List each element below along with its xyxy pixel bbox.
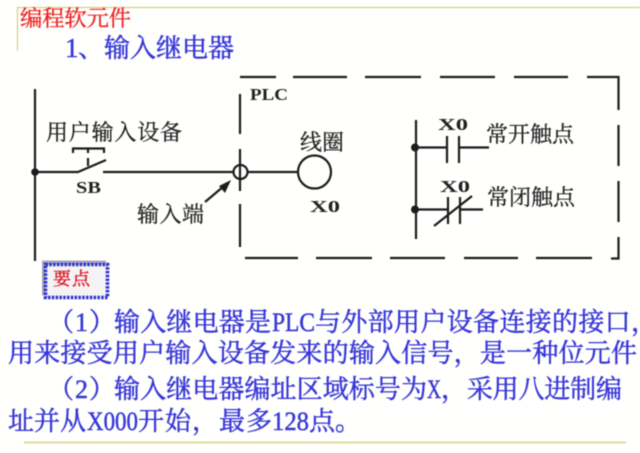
label: user input device: 用户输入设备: [46, 120, 182, 145]
label: normally open contact: 常开触点: [486, 122, 575, 147]
label: normally closed contact: 常闭触点: [487, 185, 576, 210]
label: X0 closed contact: X0: [440, 177, 470, 196]
heading: input relay: 、: [78, 34, 104, 63]
explanation text: 开始，最多: [138, 407, 272, 436]
explanation text: 1: [75, 308, 88, 337]
label: X0 open contact: X0: [438, 115, 468, 134]
input circuit: left rail and switch: [31, 89, 233, 261]
explanation text: X: [427, 375, 441, 404]
title: 编程软元件: [20, 6, 131, 31]
explanation text: [8, 308, 640, 436]
label: coil: 线圈: [300, 130, 344, 155]
explanation text: 输入继电器是: [114, 308, 271, 337]
label: input terminal: 输入端: [137, 202, 204, 227]
explanation text: （: [48, 308, 74, 337]
explanation text: 址并从: [8, 407, 86, 436]
explanation text: ，采用八进制编: [441, 375, 622, 404]
normally open and closed contacts: [411, 120, 489, 239]
heading: input relay: 输入继电器: [104, 34, 234, 63]
explanation text: 输入继电器编址区域标号为: [114, 375, 427, 404]
explanation text: ）: [89, 308, 115, 337]
explanation text: X000: [87, 407, 138, 436]
PLC dashed box: [240, 77, 618, 258]
key points badge: [42, 260, 108, 298]
explanation text: PLC: [272, 308, 315, 337]
circuit diagram: [31, 77, 618, 261]
arrow: to input terminal: [205, 180, 231, 202]
label: SB: SB: [76, 178, 101, 197]
explanation text: 点。: [309, 407, 361, 436]
explanation text: 128: [272, 407, 309, 436]
explanation text: （: [48, 375, 74, 404]
explanation text: 用来接受用户输入设备发来的输入信号，是一种位元件: [8, 339, 637, 368]
input terminal symbol: [234, 165, 248, 179]
heading: input relay: 1: [65, 33, 78, 63]
coil: [248, 156, 331, 188]
explanation text: 2: [75, 375, 88, 404]
label: X0 coil: X0: [310, 197, 340, 216]
label: PLC: PLC: [250, 85, 288, 104]
key points badge: 要点: [53, 269, 91, 289]
explanation text: ）: [89, 375, 115, 404]
